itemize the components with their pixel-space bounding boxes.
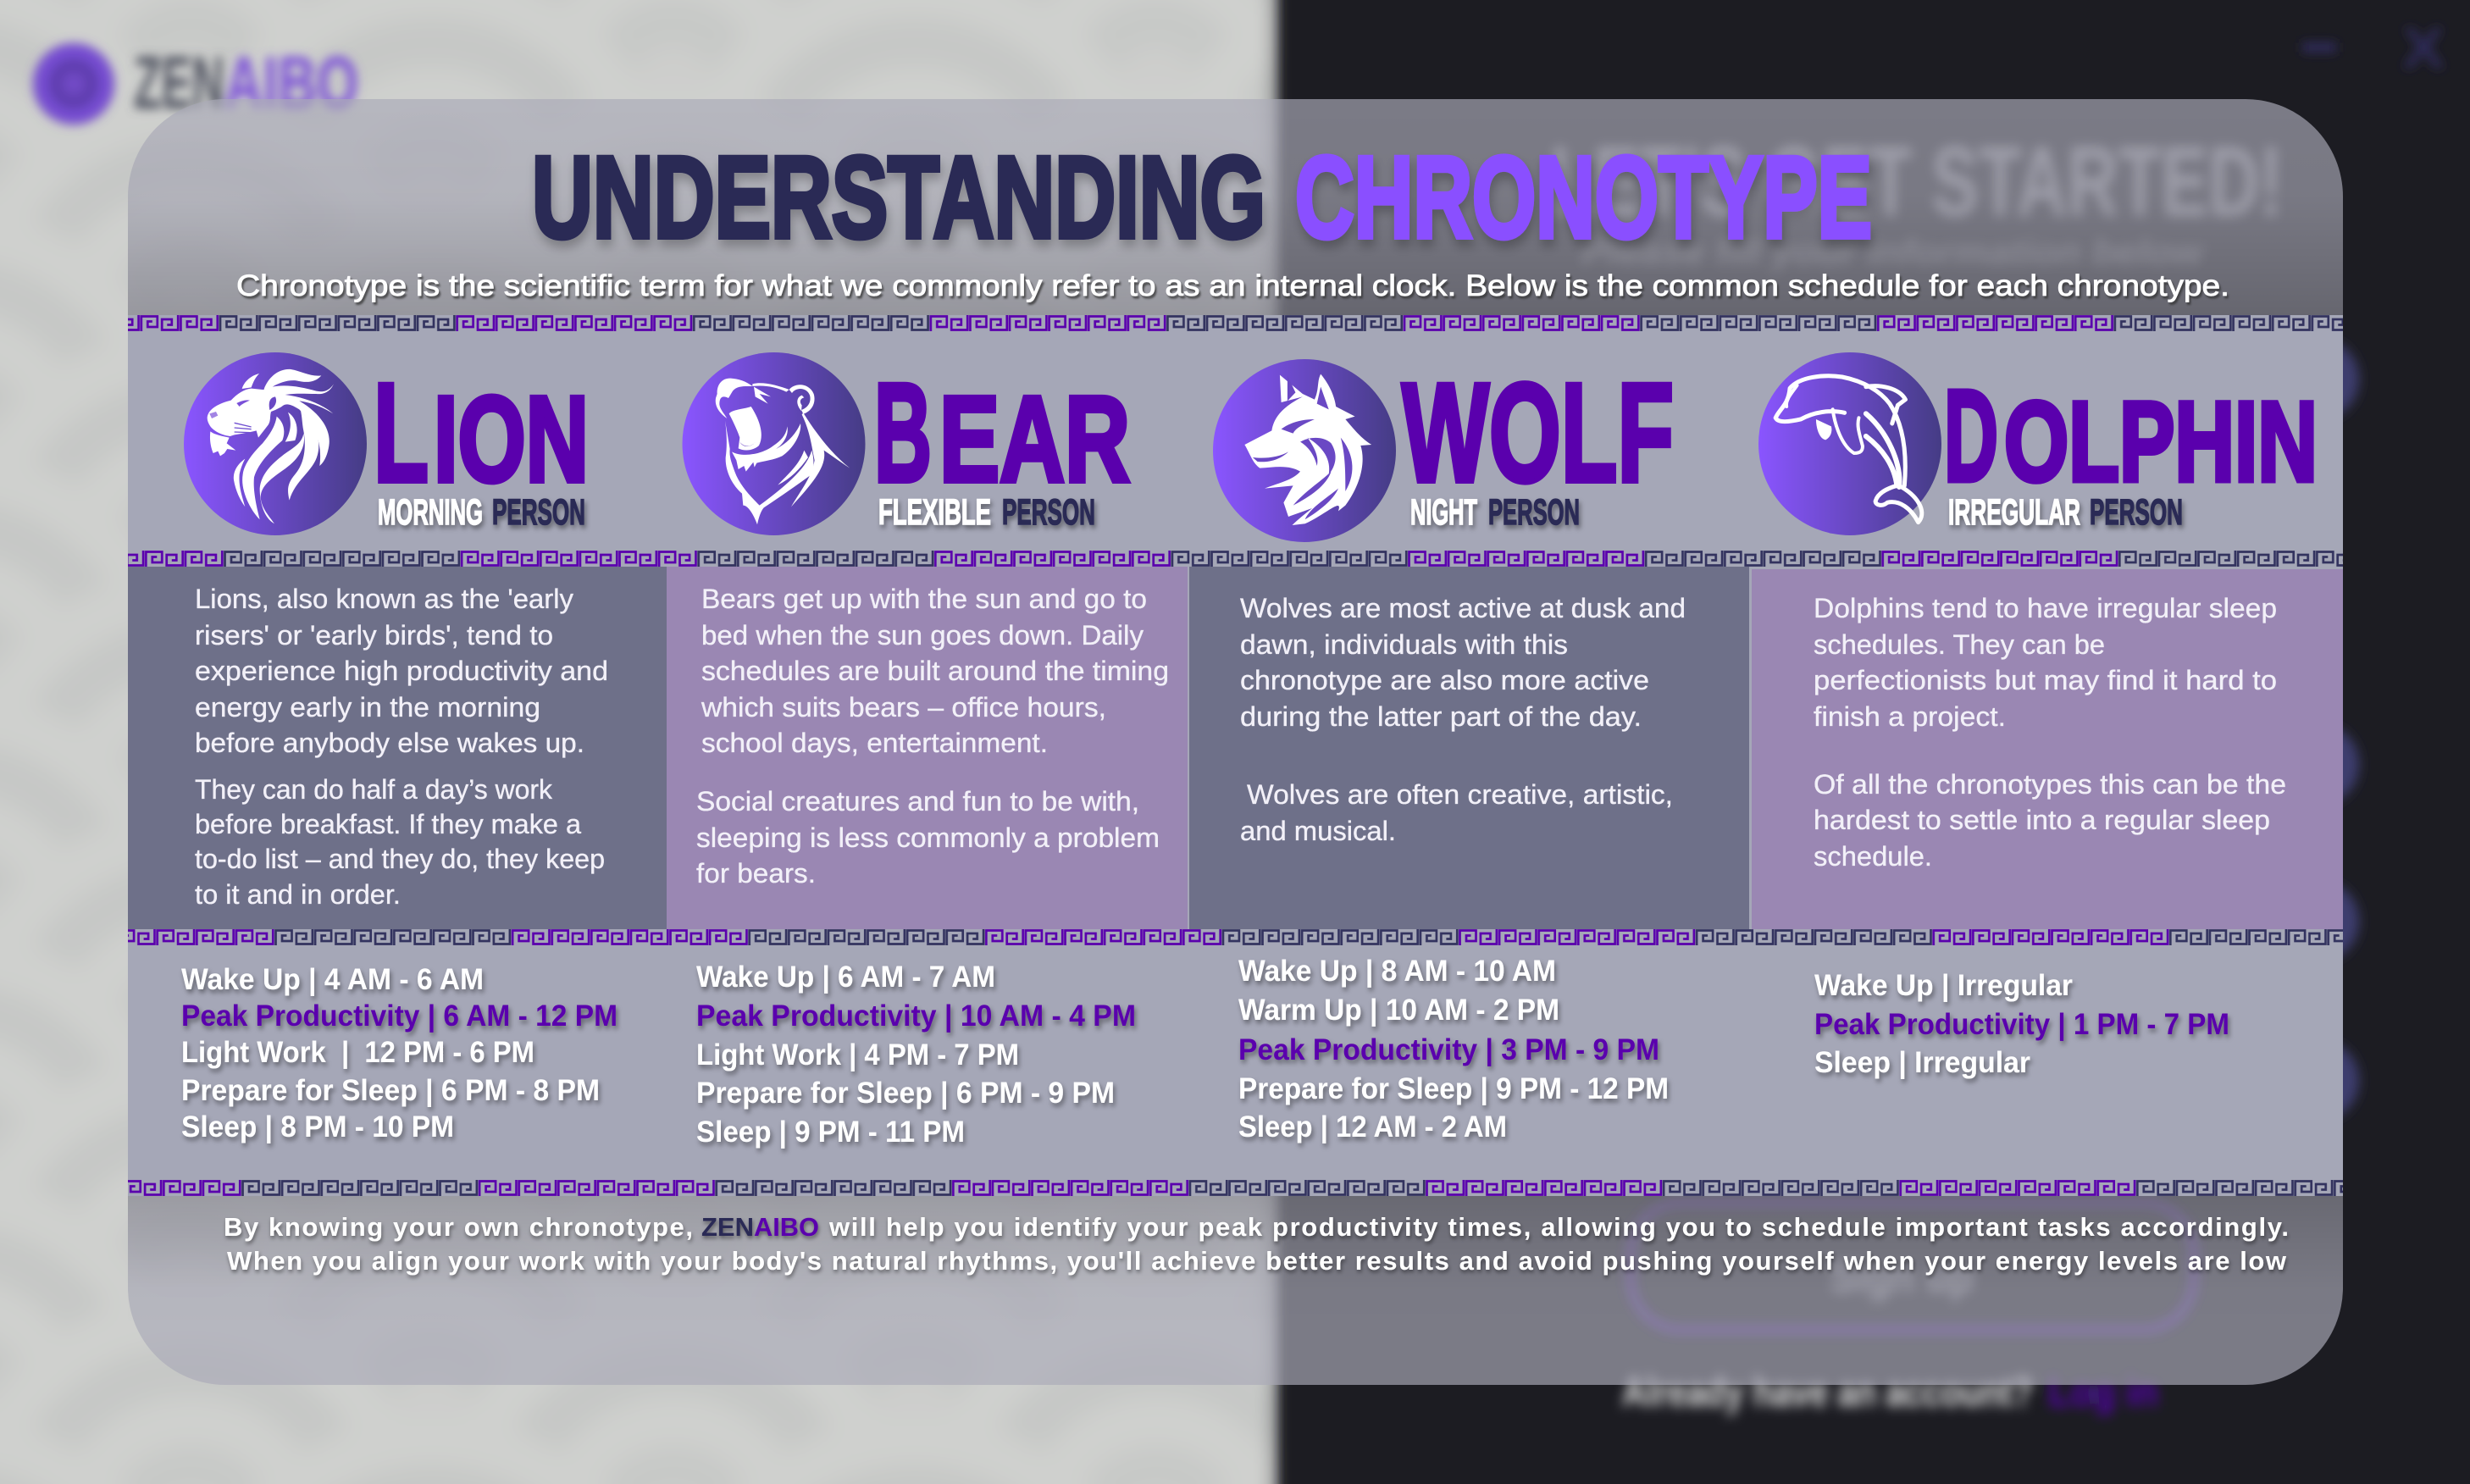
dolphin schedule [1814, 969, 2229, 1079]
footer text: By knowing your own chronotype, [224, 1212, 693, 1242]
dolphin schedule: Peak Productivity | 1 PM - 7 PM [1814, 1008, 2229, 1041]
wolf schedule [1238, 955, 1669, 1143]
login link: Log in [2048, 1368, 2158, 1415]
panel: lion description [128, 567, 667, 929]
panel: lion header [184, 352, 589, 535]
panel: dolphin description [1752, 569, 2343, 929]
lion schedule: Light Work | 12 PM - 6 PM [181, 1036, 534, 1069]
login prompt: Already have an account? [1622, 1368, 2033, 1415]
lion schedule: Prepare for Sleep | 6 PM - 8 PM [181, 1074, 600, 1107]
panel: bear description [667, 567, 1188, 929]
bear description text: Social creatures and fun to be with, [696, 786, 1139, 817]
wolf schedule: Peak Productivity | 3 PM - 9 PM [1238, 1033, 1659, 1066]
title word purple: CHRONOTYPE [1295, 133, 1872, 263]
bear name: B [874, 355, 932, 512]
panel: wolf description [1189, 567, 1749, 929]
bear description text: schedules are built around the timing [701, 656, 1169, 686]
footer text: When you align your work with your body's natural rhythms, you'll achieve better results and avoid pushing yourself when your energy levels are low [227, 1246, 2287, 1276]
logo wordmark [134, 41, 358, 125]
bear schedule: Wake Up | 6 AM - 7 AM [696, 961, 995, 994]
logo wordmark: AIBO [224, 41, 358, 125]
bear description text: Bears get up with the sun and go to [701, 584, 1147, 614]
wolf description text: dawn, individuals with this [1240, 629, 1568, 660]
dolphin subtitle: PERSON [2090, 492, 2183, 533]
footer text: AIBO [754, 1212, 819, 1242]
bear schedule: Light Work | 4 PM - 7 PM [696, 1038, 1019, 1071]
wolf description text: chronotype are also more active [1240, 665, 1649, 695]
dolphin subtitle: IRREGULAR [1948, 492, 2080, 533]
wolf subtitle: PERSON [1488, 492, 1580, 533]
dolphin description text: Of all the chronotypes this can be the [1814, 769, 2286, 800]
lion description text: before anybody else wakes up. [195, 728, 584, 758]
wolf description text: Wolves are often creative, artistic, [1247, 779, 1673, 810]
title [532, 133, 1872, 263]
lion description text: to it and in order. [195, 879, 401, 910]
dolphin description text: hardest to settle into a regular sleep [1814, 805, 2270, 835]
subheading: Please fill your information below [1581, 232, 2205, 272]
lion description text: energy early in the morning [195, 692, 540, 723]
lion schedule: Peak Productivity | 6 AM - 12 PM [181, 999, 618, 1033]
dolphin name: D [1944, 363, 1998, 508]
greek key borders [0, 315, 2406, 1196]
logo mark [33, 43, 114, 125]
bear name: EAR [939, 371, 1130, 507]
wolf schedule: Warm Up | 10 AM - 2 PM [1238, 994, 1559, 1027]
footer text: will help you identify your peak productivity times, allowing you to schedule important tasks accordingly. [828, 1212, 2289, 1242]
dolphin name [1944, 363, 2318, 508]
wolf subtitle [1410, 492, 1580, 533]
dolphin description text: finish a project. [1814, 701, 2006, 732]
wolf name: WOLF [1402, 355, 1674, 512]
dolphin description text: schedules. They can be [1814, 629, 2105, 660]
bear description text [696, 584, 1169, 889]
lion schedule: Sleep | 8 PM - 10 PM [181, 1110, 454, 1143]
lion subtitle: PERSON [492, 492, 585, 533]
bear schedule: Peak Productivity | 10 AM - 4 PM [696, 999, 1136, 1033]
bear description text: which suits bears – office hours, [701, 692, 1106, 723]
blurred background: light scallop half [0, 0, 1281, 1484]
bear description text: for bears. [696, 858, 816, 889]
dolphin description text: perfectionists but may find it hard to [1814, 665, 2277, 695]
lion name: L [374, 355, 429, 512]
bear description text: sleeping is less commonly a problem [696, 822, 1160, 853]
wolf description text: during the latter part of the day. [1240, 701, 1642, 732]
footer text: ZEN [701, 1212, 754, 1242]
lion description text [195, 584, 608, 910]
bear description text: bed when the sun goes down. Daily [701, 620, 1144, 651]
footer text [224, 1212, 2289, 1276]
lion description text: Lions, also known as the 'early [195, 584, 573, 614]
bear subtitle: PERSON [1002, 492, 1095, 533]
wolf schedule: Sleep | 12 AM - 2 AM [1238, 1110, 1507, 1143]
wolf schedule: Prepare for Sleep | 9 PM - 12 PM [1238, 1072, 1669, 1105]
icon: bear [683, 352, 866, 535]
lion description text: before breakfast. If they make a [195, 809, 581, 839]
panel: wolf header [1213, 355, 1674, 542]
panel: bear header [683, 352, 1130, 535]
bear subtitle: FLEXIBLE [878, 492, 991, 533]
dolphin name: OLPHIN [2004, 379, 2318, 505]
signup label: Sign up [1830, 1253, 1974, 1302]
wolf description text: and musical. [1240, 816, 1396, 846]
input fields [1609, 339, 2359, 1121]
subtitle: Chronotype is the scientific term for what we commonly refer to as an internal clock. Below is the common schedule for each chronotype. [236, 269, 2229, 302]
panel: dolphin header [1758, 352, 2318, 535]
dolphin description text: Dolphins tend to have irregular sleep [1814, 593, 2277, 623]
lion description text: risers' or 'early birds', tend to [195, 620, 553, 651]
lion description text: They can do half a day’s work [195, 774, 553, 805]
close icon: X [2402, 16, 2445, 80]
panel: main glass card [128, 99, 2343, 1385]
title word dark: UNDERSTANDING [532, 133, 1265, 263]
bear name [874, 355, 1130, 512]
dolphin schedule: Wake Up | Irregular [1814, 969, 2073, 1002]
blurred background window controls [2302, 16, 2445, 80]
signup button [1631, 1203, 2194, 1330]
bear schedule: Sleep | 9 PM - 11 PM [696, 1116, 965, 1149]
dolphin description text: schedule. [1814, 841, 1932, 872]
lion schedule [181, 963, 618, 1143]
dolphin description text [1814, 593, 2286, 872]
lion schedule: Wake Up | 4 AM - 6 AM [181, 963, 484, 996]
lion subtitle: MORNING [378, 492, 483, 533]
wolf schedule: Wake Up | 8 AM - 10 AM [1238, 955, 1556, 988]
icon: dolphin [1758, 352, 1941, 535]
lion name: ION [434, 371, 589, 507]
bear schedule: Prepare for Sleep | 6 PM - 9 PM [696, 1077, 1115, 1110]
dolphin schedule: Sleep | Irregular [1814, 1046, 2030, 1079]
lion description text: to-do list – and they do, they keep [195, 844, 605, 874]
icon: lion [184, 352, 367, 535]
bear description text: school days, entertainment. [701, 728, 1048, 758]
logo wordmark: ZEN [134, 41, 224, 125]
lion description text: experience high productivity and [195, 656, 608, 686]
blurred background: dark half [1281, 0, 2470, 1484]
wolf description text [1240, 593, 1686, 846]
icon: wolf [1213, 359, 1396, 542]
blurred background logo [33, 41, 358, 125]
bear schedule [696, 961, 1136, 1149]
lion name [374, 355, 589, 512]
blurred background signup form [1550, 126, 2359, 1415]
wolf description text: Wolves are most active at dusk and [1240, 593, 1686, 623]
minimize icon [2302, 42, 2336, 53]
wolf subtitle: NIGHT [1410, 492, 1477, 533]
